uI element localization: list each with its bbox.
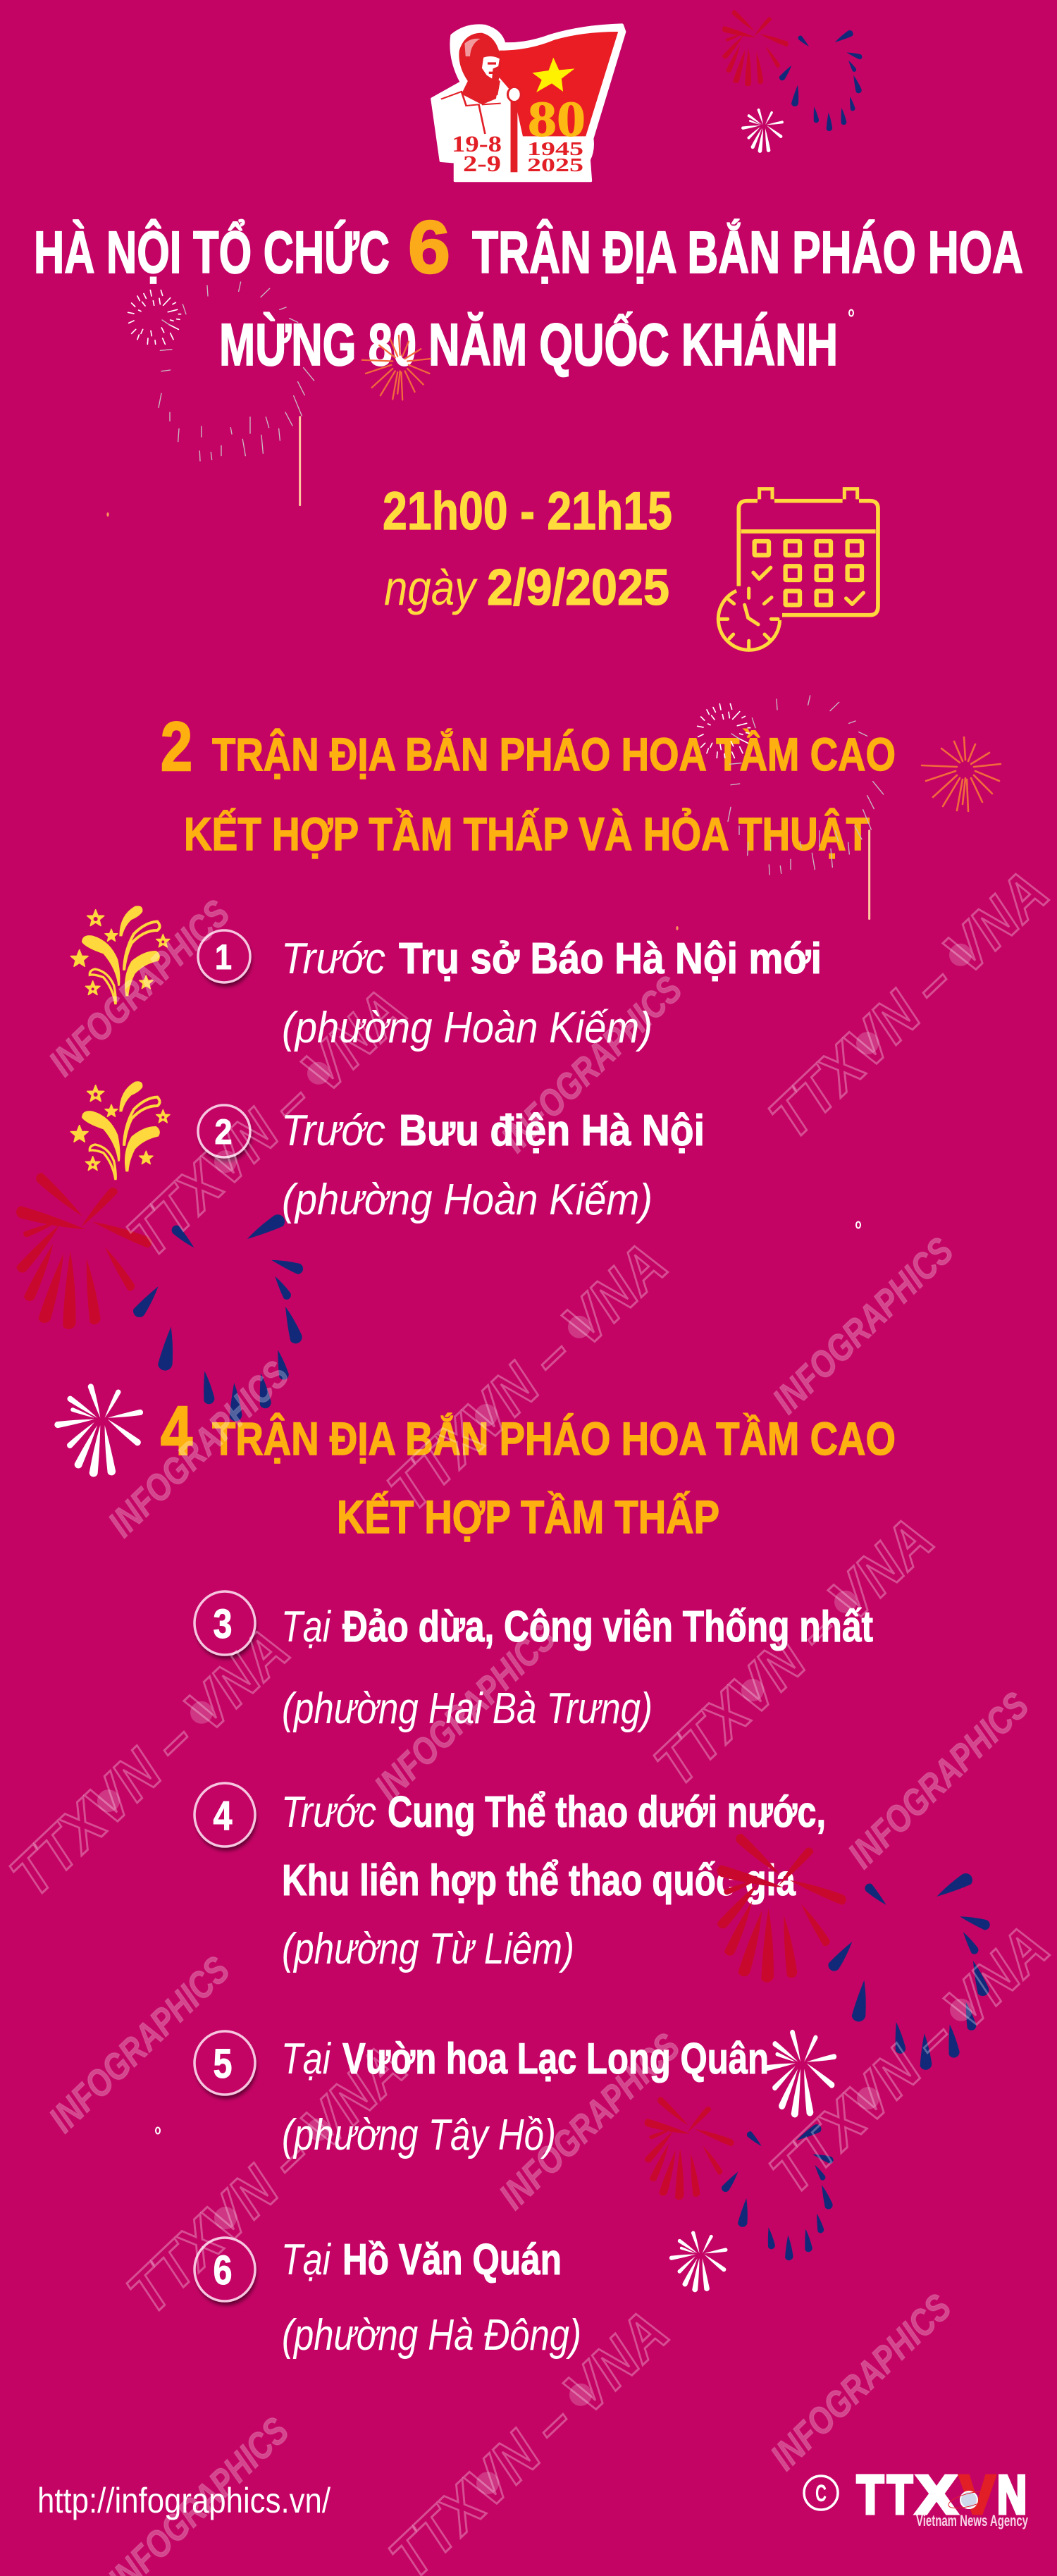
item 2: (phường Hoàn Kiếm) <box>282 1176 653 1224</box>
watermarks: INFOGRAPHICS <box>366 1617 564 1808</box>
time and date: 21h00 - 21h15 <box>383 481 672 541</box>
watermarks: INFOGRAPHICS <box>491 2026 688 2217</box>
logo: 80 years national day emblem: 2025 <box>527 154 583 175</box>
heading: 4 firework sites: KẾT HỢP TẦM THẤP <box>337 1491 719 1543</box>
firework: dashed burst by heading <box>676 696 884 930</box>
watermarks: INFOGRAPHICS <box>765 1230 962 1422</box>
item 4: (phường Từ Liêm) <box>282 1925 574 1973</box>
item 2: Trước <box>281 1107 385 1155</box>
item 3: (phường Hai Bà Trưng) <box>282 1684 653 1733</box>
firework: red and navy left <box>15 1171 304 1422</box>
footer logo: TTXVN: C <box>815 2480 827 2507</box>
watermarks: TTXVN – VNA <box>114 976 419 1270</box>
icon: calendar and clock <box>718 489 878 650</box>
item 6: (phường Hà Đông) <box>282 2311 581 2360</box>
logo: 80 years national day emblem: 19-8 <box>452 132 502 157</box>
watermarks: INFOGRAPHICS <box>762 2286 960 2478</box>
logo: 80 years national day emblem: 80 <box>528 91 586 147</box>
item 5 <box>194 2031 769 2159</box>
item 3: 3 <box>213 1601 233 1647</box>
item 3: Đảo dừa, Công viên Thống nhất <box>342 1603 873 1651</box>
footer logo: TTXVN: X <box>916 2465 957 2525</box>
item 5: Tại <box>281 2035 332 2083</box>
firework: white left of heading <box>54 1383 144 1477</box>
firework: orange over title <box>362 335 431 400</box>
watermarks: INFOGRAPHICS <box>493 968 691 1160</box>
firework: white by item 6 <box>669 2231 728 2293</box>
footer logo: TTXVN: T <box>857 2465 884 2525</box>
firework: orange right of heading <box>922 737 1001 811</box>
watermarks: TTXVN – VNA <box>641 1505 946 1799</box>
heading: 2 firework sites <box>161 708 896 860</box>
firework: red and navy bottom <box>643 2096 834 2260</box>
item 3 <box>194 1591 873 1733</box>
title: HÀ NỘI TỔ CHỨC <box>34 219 390 285</box>
icon: fountain firework 2 <box>70 1081 170 1180</box>
watermarks: TTXVN – VNA <box>375 1230 680 1524</box>
title: 6 <box>408 206 450 289</box>
item 4: Khu liên hợp thể thao quốc gia <box>282 1856 796 1905</box>
item 1: Trước <box>281 935 385 983</box>
time and date: ngày <box>384 560 478 615</box>
watermarks: TTXVN – VNA <box>114 2033 419 2327</box>
firework: white by item 5 <box>762 2029 837 2118</box>
item 3: Tại <box>281 1603 332 1651</box>
item 6: Tại <box>281 2236 332 2284</box>
footer logo: TTXVN: N <box>997 2465 1027 2525</box>
item 1: 1 <box>215 937 232 977</box>
title <box>34 206 1023 378</box>
logo: 80 years national day emblem: 1945 <box>527 138 583 159</box>
logo: 80 years national day emblem <box>432 25 624 181</box>
heading: 4 firework sites <box>161 1392 896 1543</box>
footer logo: TTXVN: T <box>887 2465 913 2525</box>
logo: 80 years national day emblem: 2-9 <box>463 152 501 177</box>
heading: 2 firework sites: KẾT HỢP TẦM THẤP VÀ HỎA THUẬT <box>184 808 870 860</box>
item 1 <box>198 930 822 1052</box>
heading: 2 firework sites: TRẬN ĐỊA BẮN PHÁO HOA TẦM CAO <box>212 728 896 780</box>
item 4: 4 <box>213 1793 233 1839</box>
time and date <box>383 481 672 616</box>
footer logo: TTXVN <box>804 2465 1029 2529</box>
watermarks: INFOGRAPHICS <box>41 892 238 1084</box>
item 6: 6 <box>213 2248 233 2293</box>
heading: 2 firework sites: 2 <box>161 708 192 785</box>
footer url: http://infographics.vn/ <box>37 2481 330 2520</box>
item 6: Hồ Văn Quán <box>342 2236 562 2284</box>
time and date: 2/9/2025 <box>487 560 669 616</box>
item 6 <box>194 2236 581 2360</box>
item 2: Bưu điện Hà Nội <box>399 1107 705 1155</box>
item 2 <box>198 1105 705 1224</box>
heading: 4 firework sites: 4 <box>161 1392 192 1469</box>
watermarks: INFOGRAPHICS <box>100 1353 297 1545</box>
item 5: Vườn hoa Lạc Long Quân <box>342 2035 769 2083</box>
item 4: Cung Thể thao dưới nước, <box>388 1788 826 1837</box>
item 5: (phường Tây Hồ) <box>282 2111 556 2159</box>
item 4: Trước <box>281 1788 376 1837</box>
item 5: 5 <box>213 2041 233 2087</box>
icon: fountain firework 1 <box>70 906 170 1004</box>
item 1: Trụ sở Báo Hà Nội mới <box>399 935 822 983</box>
watermarks: INFOGRAPHICS <box>41 1949 238 2140</box>
firework: red and navy lower right <box>716 1832 991 2070</box>
title: MỪNG 80 NĂM QUỐC KHÁNH <box>219 312 838 378</box>
heading: 4 firework sites: TRẬN ĐỊA BẮN PHÁO HOA TẦM CAO <box>212 1412 896 1465</box>
watermarks <box>0 858 1057 2576</box>
sparkles <box>156 310 860 2134</box>
watermarks: TTXVN – VNA <box>0 1615 302 1909</box>
firework: red and navy top right <box>722 9 863 153</box>
item 4 <box>194 1783 826 1973</box>
item 2: 2 <box>214 1112 233 1152</box>
item 1: (phường Hoàn Kiếm) <box>282 1004 653 1052</box>
footer logo: TTXVN: V <box>960 2465 995 2525</box>
firework: dashed burst under title <box>106 282 314 517</box>
